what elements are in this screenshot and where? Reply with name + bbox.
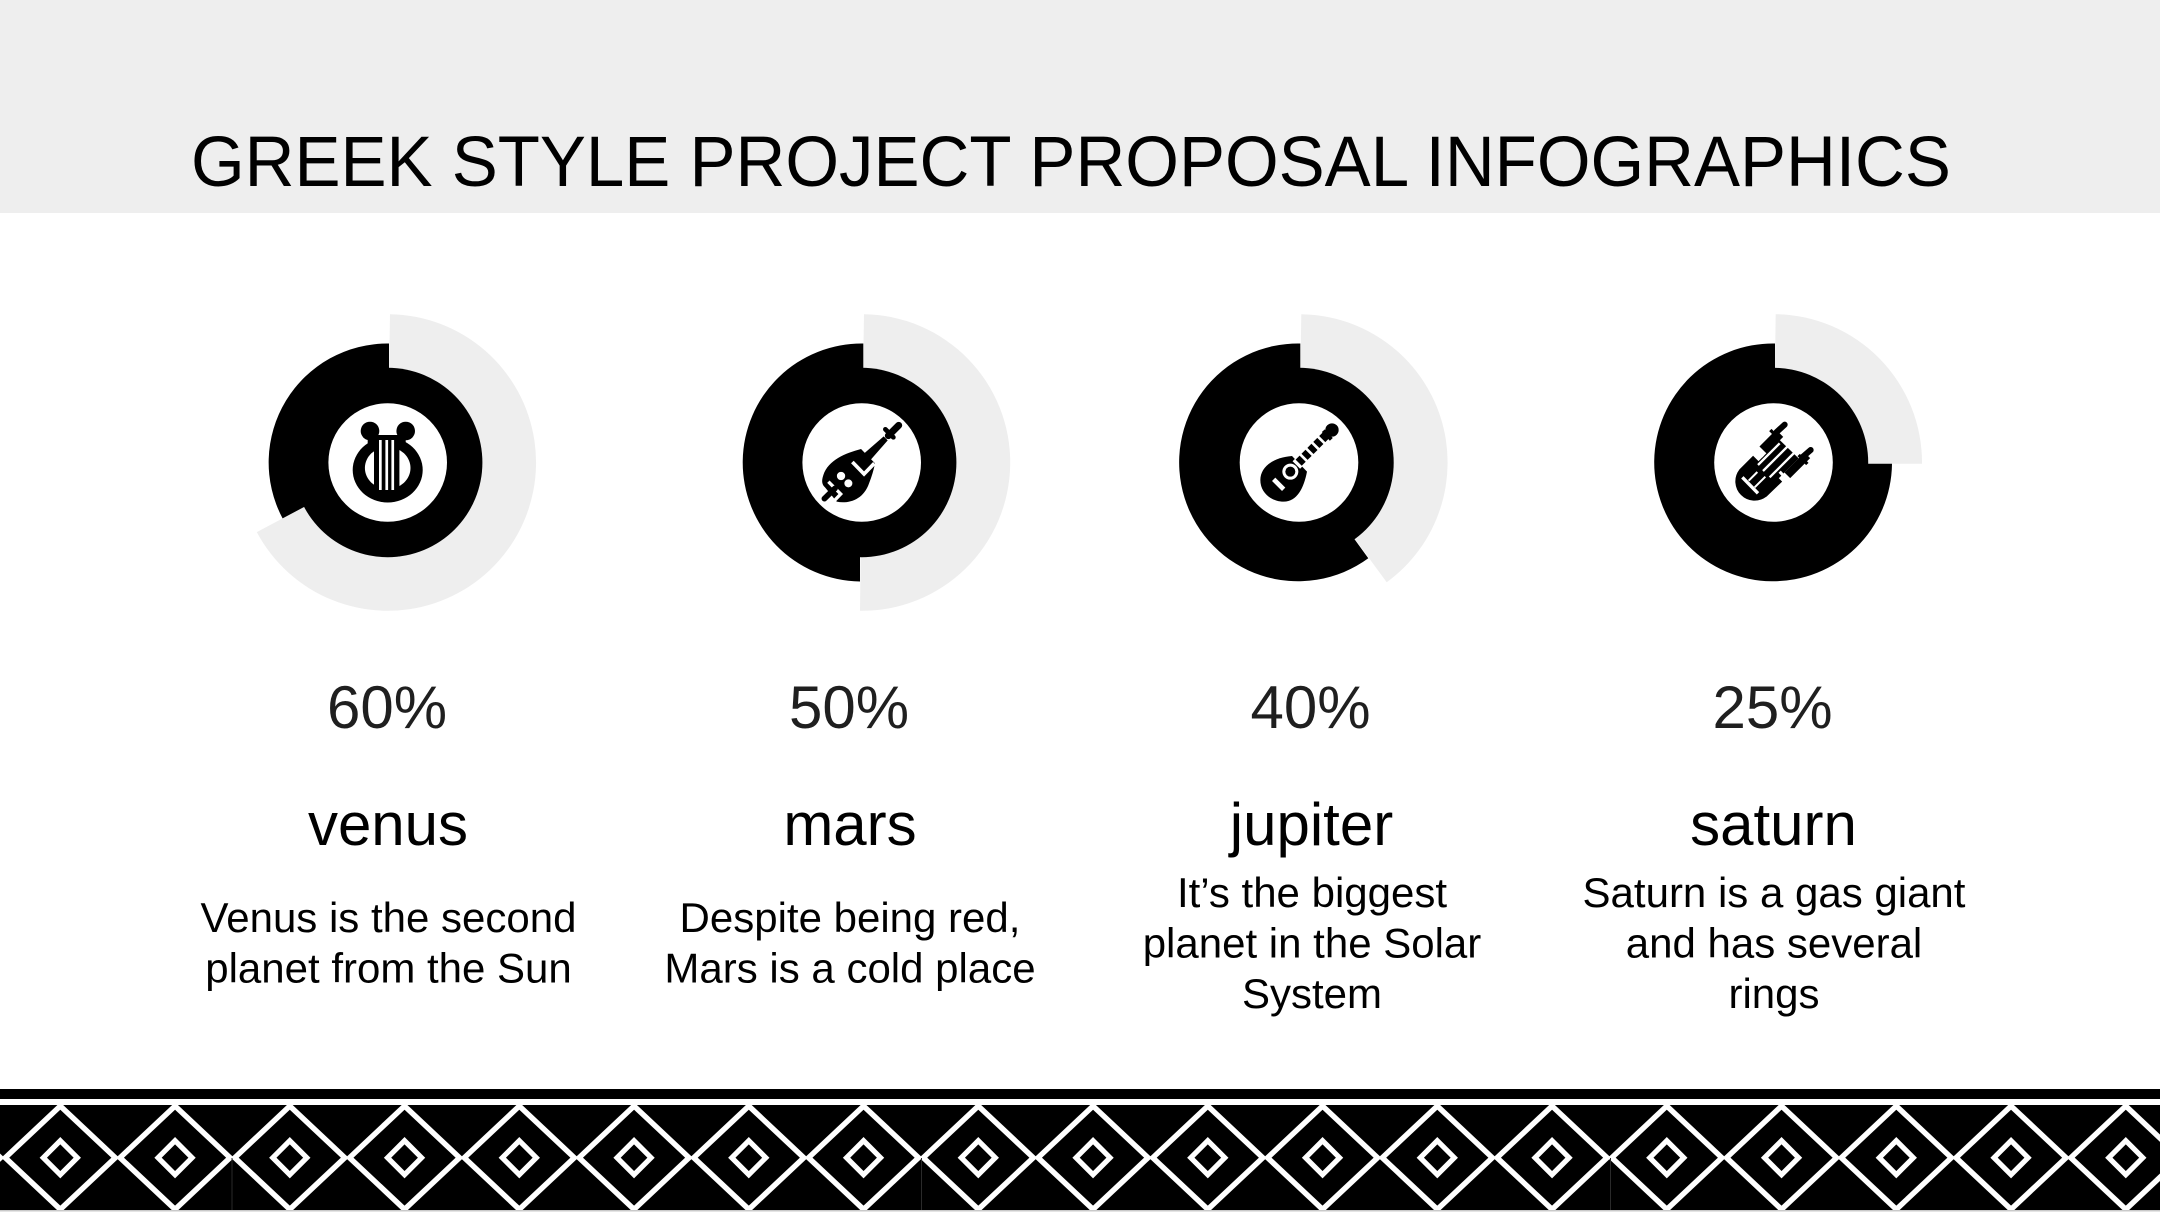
donut chart: venus 60%	[257, 314, 536, 611]
description: jupiter: planet in the Solar	[1143, 920, 1481, 967]
percentage: 40%: 40%	[1250, 674, 1371, 741]
name: mars: mars	[783, 791, 917, 858]
icon: kithara	[1741, 425, 1811, 496]
panel: saturn	[1583, 314, 1966, 1017]
description: mars: Despite being red,	[680, 894, 1020, 941]
panel: venus	[201, 314, 576, 992]
percentage: 50%: 50%	[789, 674, 909, 741]
description: saturn: Saturn is a gas giant	[1583, 869, 1966, 916]
title: GREEK STYLE PROJECT PROPOSAL INFOGRAPHICS	[191, 122, 1951, 201]
footer: greek key pattern band	[0, 1089, 2160, 1212]
panel: mars	[664, 314, 1036, 992]
icon: oud	[1260, 423, 1339, 502]
description: saturn: and has several	[1626, 920, 1922, 967]
description: venus: planet from the Sun	[205, 945, 572, 992]
description: mars: Mars is a cold place	[664, 945, 1036, 992]
description: venus: Venus is the second	[201, 894, 576, 941]
donut chart: jupiter 40%	[1179, 314, 1448, 582]
icon: mandolin	[822, 425, 899, 502]
donut chart: saturn 25%	[1654, 314, 1922, 581]
name: jupiter: jupiter	[1228, 791, 1393, 858]
header band	[0, 0, 2160, 213]
icon: lyre	[353, 422, 423, 502]
name: venus: venus	[308, 791, 468, 858]
panel: jupiter	[1143, 314, 1481, 1017]
name: saturn: saturn	[1690, 791, 1857, 858]
donut chart: mars 50%	[743, 314, 1010, 611]
description: jupiter: It’s the biggest	[1177, 869, 1447, 916]
description: jupiter: System	[1242, 970, 1382, 1017]
percentage: 25%: 25%	[1712, 674, 1833, 741]
percentage: 60%: 60%	[327, 674, 447, 741]
description: saturn: rings	[1728, 970, 1820, 1017]
